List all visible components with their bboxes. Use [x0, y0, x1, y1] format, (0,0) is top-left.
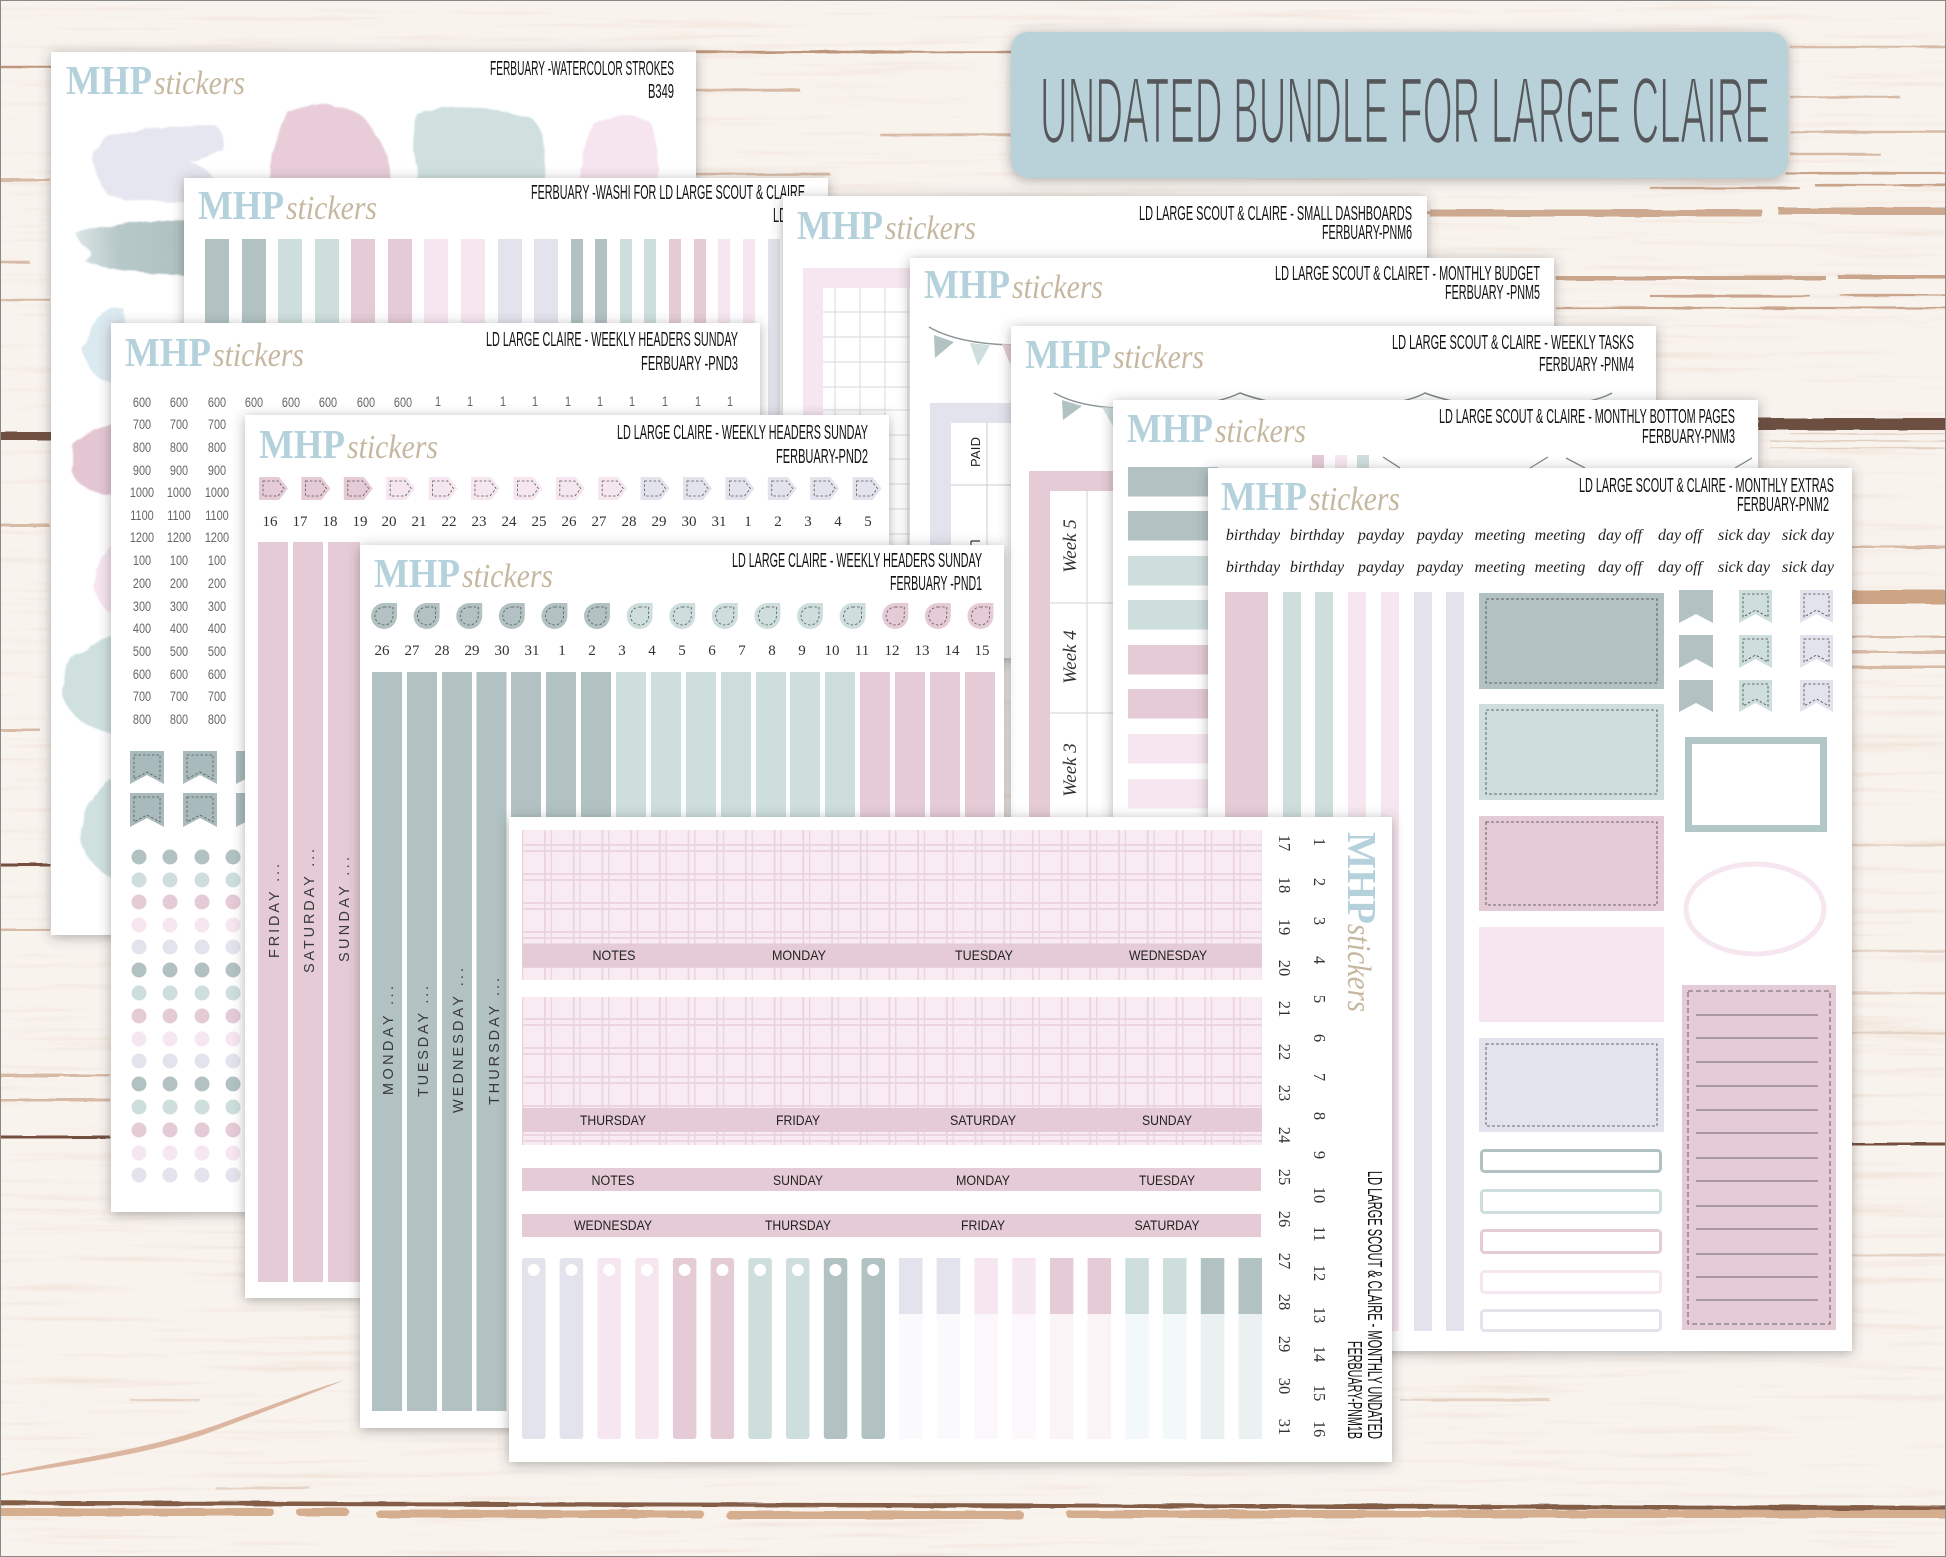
rotated date column 17-31: 17 — [1275, 835, 1294, 851]
plaid note block two: THURSDAY — [580, 1112, 647, 1128]
sheet title text: LD LARGE CLAIRE - WEEKLY HEADERS SUNDAY — [732, 550, 982, 572]
dashed label boxes — [1479, 593, 1664, 1132]
plaid note block two: SUNDAY — [1142, 1112, 1193, 1128]
sheet title text — [1579, 475, 1834, 516]
square frame — [1688, 740, 1824, 828]
time numbers grid: 800 — [170, 712, 188, 727]
time numbers grid: 100 — [208, 553, 226, 568]
time numbers grid: 900 — [170, 463, 188, 478]
sheet title text: LD — [773, 205, 787, 227]
sheet: small dashboards — [783, 196, 1427, 600]
date numbers: 15 — [974, 643, 990, 659]
sheet title text: FERBUARY-PNM3 — [1642, 426, 1735, 448]
time numbers grid: 600 — [133, 667, 151, 682]
sheet: monthly bottom pages — [1113, 400, 1758, 900]
sheet title text — [531, 182, 805, 227]
lined notes panel — [1682, 985, 1836, 1330]
sheet title text: FERBUARY-PND2 — [776, 446, 868, 468]
time numbers grid: 600 — [282, 395, 300, 410]
sheet title text — [490, 58, 674, 103]
date numbers: 26 — [562, 514, 577, 530]
oval frame — [1686, 864, 1824, 954]
logo: MHP stickers: stickers — [1215, 413, 1306, 450]
date numbers: 31 — [524, 643, 540, 659]
plaid note block one: MONDAY — [772, 947, 827, 963]
time numbers grid: 900 — [133, 463, 151, 478]
time numbers grid: 500 — [133, 644, 151, 659]
rotated date column 1-16: 14 — [1310, 1346, 1329, 1362]
date numbers: 12 — [884, 643, 900, 659]
time numbers grid: 1000 — [205, 485, 229, 500]
day band three — [522, 1168, 1261, 1191]
logo: MHP stickers: stickers — [154, 65, 245, 102]
date numbers: 10 — [824, 643, 840, 659]
time numbers grid: 1000 — [130, 485, 154, 500]
rotated date column 1-16: 13 — [1310, 1307, 1329, 1323]
vertical stripes — [1225, 592, 1464, 1331]
date numbers: 3 — [804, 514, 812, 530]
rotated date column 17-31: 21 — [1275, 1001, 1294, 1017]
time numbers grid: 800 — [133, 440, 151, 455]
logo: MHP stickers: MHP — [374, 550, 460, 596]
logo: MHP stickers: stickers — [885, 210, 976, 247]
sheet: weekly headers PND3 — [111, 323, 760, 1212]
sheet: monthly budget — [910, 258, 1554, 658]
small stripes and garland ends — [1312, 455, 1752, 475]
time numbers grid: 800 — [208, 440, 226, 455]
date numbers: 30 — [682, 514, 696, 530]
rounded outline bars — [1482, 1150, 1660, 1330]
time numbers grid: 600 — [208, 395, 226, 410]
script word labels: payday — [1416, 527, 1464, 544]
page-flag tabs with holes — [522, 1258, 885, 1439]
rotated date column 1-16: 9 — [1310, 1151, 1329, 1159]
logo: MHP stickers: MHP — [259, 421, 345, 467]
date numbers: 4 — [834, 514, 842, 530]
date numbers: 4 — [648, 643, 656, 659]
time numbers grid: 700 — [133, 689, 151, 704]
rotated date column 17-31: 23 — [1275, 1085, 1294, 1101]
bunting garland — [1054, 393, 1612, 426]
week labels: Week 3 — [1060, 743, 1081, 797]
sheet title text — [1139, 203, 1412, 244]
day band four — [522, 1214, 1261, 1237]
time numbers grid: 1 — [435, 394, 441, 409]
time numbers grid: 600 — [208, 667, 226, 682]
sheet title text: FERBUARY-PNM6 — [1322, 222, 1412, 244]
rotated date column 1-16 — [1310, 838, 1329, 1437]
sheet title text: FERBUARY -PND1 — [890, 573, 982, 595]
logo: MHP stickers: stickers — [347, 429, 438, 466]
logo: MHP stickers — [1221, 473, 1400, 519]
script word labels: birthday — [1290, 559, 1345, 576]
time numbers grid: 700 — [170, 689, 188, 704]
watercolor blobs — [62, 104, 658, 882]
rotated logo: MHP — [1339, 832, 1385, 924]
time numbers grid: 700 — [208, 689, 226, 704]
sheet: watercolor strokes — [51, 52, 696, 935]
time numbers grid: 1100 — [130, 508, 154, 523]
dot stickers — [139, 857, 233, 1175]
time numbers grid: 600 — [319, 395, 337, 410]
script word labels: sick day — [1782, 527, 1835, 544]
date numbers: 2 — [588, 643, 596, 659]
logo: MHP stickers: stickers — [462, 558, 553, 595]
logo: MHP stickers — [1127, 405, 1306, 451]
weekly table frame — [1029, 471, 1200, 830]
date numbers — [262, 514, 872, 530]
date numbers: 31 — [712, 514, 726, 530]
script word labels: day off — [1658, 527, 1705, 544]
plaid note block one: TUESDAY — [955, 947, 1014, 963]
vertical day strips: FRIDAY ... — [267, 864, 283, 958]
logo: MHP stickers: stickers — [1012, 269, 1103, 306]
time numbers grid: 200 — [170, 576, 188, 591]
rotated date column 1-16: 10 — [1310, 1187, 1329, 1203]
logo: MHP stickers: MHP — [66, 57, 152, 103]
vertical day strips: THURSDAY ... — [487, 978, 503, 1105]
time numbers grid: 1 — [727, 394, 733, 409]
time numbers grid: 700 — [208, 417, 226, 432]
script word labels: payday — [1416, 559, 1464, 576]
time numbers grid: 1 — [597, 394, 603, 409]
rotated date column 17-31: 29 — [1275, 1336, 1294, 1352]
date numbers — [374, 643, 990, 659]
logo: MHP stickers: MHP — [125, 329, 211, 375]
time numbers grid: 600 — [394, 395, 412, 410]
time numbers grid: 600 — [170, 667, 188, 682]
date numbers: 3 — [618, 643, 626, 659]
tab icons — [259, 477, 882, 500]
vertical day strips — [372, 672, 995, 1411]
date numbers: 24 — [502, 514, 517, 530]
day band three: SUNDAY — [773, 1172, 824, 1188]
script word labels: sick day — [1718, 527, 1771, 544]
sheet: washi strips — [184, 178, 828, 578]
time numbers grid: 500 — [208, 644, 226, 659]
script word labels: birthday — [1290, 527, 1345, 544]
horizontal stripes — [1128, 467, 1218, 808]
script word labels: payday — [1357, 527, 1405, 544]
sheet: monthly extras — [1208, 468, 1852, 1351]
logo: MHP stickers — [259, 421, 438, 467]
day band four: WEDNESDAY — [574, 1217, 653, 1233]
sheet: monthly undated PNM1B — [509, 817, 1392, 1462]
time numbers grid: 800 — [170, 440, 188, 455]
rotated date column 1-16: 11 — [1310, 1226, 1329, 1242]
rotated date column 1-16: 6 — [1310, 1034, 1329, 1042]
rotated date column 17-31: 24 — [1275, 1127, 1294, 1143]
rotated logo — [1339, 832, 1385, 1012]
day band three: MONDAY — [956, 1172, 1011, 1188]
script word labels: birthday — [1226, 527, 1281, 544]
script word labels: meeting — [1475, 527, 1525, 544]
rotated date column 1-16: 5 — [1310, 995, 1329, 1003]
plaid note block one — [522, 830, 1262, 980]
sheet title text — [617, 422, 868, 468]
rotated logo: stickers — [1340, 924, 1377, 1012]
script word labels: day off — [1658, 559, 1705, 576]
date numbers: 17 — [292, 514, 308, 530]
sheet title text: FERBUARY -PNM4 — [1539, 354, 1634, 376]
date numbers: 20 — [382, 514, 396, 530]
vertical day strips: TUESDAY ... — [416, 986, 432, 1097]
time numbers grid: 400 — [208, 621, 226, 636]
time numbers grid: 400 — [170, 621, 188, 636]
time numbers grid: 1 — [695, 394, 701, 409]
sheet title text: FERBUARY -PNM5 — [1445, 282, 1540, 304]
logo: MHP stickers: MHP — [1127, 405, 1213, 451]
logo: MHP stickers: MHP — [797, 202, 883, 248]
time numbers grid: 200 — [133, 576, 151, 591]
week labels: Week 4 — [1060, 630, 1081, 684]
time numbers grid — [130, 394, 733, 727]
time numbers grid: 300 — [208, 599, 226, 614]
sheet: weekly headers PND2 — [245, 415, 889, 1298]
date numbers: 5 — [864, 514, 872, 530]
rotated date column 17-31: 26 — [1275, 1211, 1294, 1227]
rotated date column 1-16: 1 — [1310, 838, 1329, 846]
date numbers: 8 — [768, 643, 776, 659]
logo: MHP stickers: MHP — [924, 261, 1010, 307]
vertical day strips: SATURDAY ... — [302, 849, 318, 973]
sheet title text — [1439, 406, 1735, 448]
date numbers: 23 — [472, 514, 486, 530]
rotated date column 17-31: 18 — [1275, 877, 1294, 893]
time numbers grid: 600 — [170, 395, 188, 410]
day band four: FRIDAY — [961, 1217, 1006, 1233]
sheet title text — [732, 550, 982, 595]
plaid note block two: FRIDAY — [776, 1112, 821, 1128]
time numbers grid: 1200 — [167, 530, 191, 545]
date numbers: 9 — [798, 643, 806, 659]
time numbers grid: 1 — [565, 394, 571, 409]
sheet title text: LD LARGE CLAIRE - WEEKLY HEADERS SUNDAY — [486, 329, 738, 351]
time numbers grid: 600 — [133, 395, 151, 410]
date numbers: 5 — [678, 643, 686, 659]
date numbers: 7 — [738, 643, 746, 659]
time numbers grid: 1200 — [130, 530, 154, 545]
script word labels: birthday — [1226, 559, 1281, 576]
script word labels: meeting — [1535, 559, 1585, 576]
time numbers grid: 1 — [532, 394, 538, 409]
time numbers grid: 100 — [133, 553, 151, 568]
logo: MHP stickers: MHP — [1025, 331, 1111, 377]
time numbers grid: 800 — [133, 712, 151, 727]
time numbers grid: 1100 — [205, 508, 229, 523]
time numbers grid: 500 — [170, 644, 188, 659]
date numbers: 16 — [262, 514, 278, 530]
rotated date column 1-16: 4 — [1310, 956, 1329, 964]
flag icons — [1679, 590, 1833, 712]
date numbers: 11 — [855, 643, 869, 659]
sheet: weekly tasks — [1011, 326, 1656, 830]
script word labels: sick day — [1718, 559, 1771, 576]
time numbers grid: 600 — [245, 395, 263, 410]
logo: MHP stickers: stickers — [1309, 481, 1400, 518]
logo: MHP stickers — [924, 261, 1103, 307]
logo: MHP stickers: stickers — [1113, 339, 1204, 376]
date numbers: 30 — [494, 643, 510, 659]
logo: MHP stickers — [374, 550, 553, 596]
two-tone page-flag tabs — [899, 1258, 1262, 1439]
time numbers grid: 300 — [170, 599, 188, 614]
script word labels: day off — [1598, 559, 1645, 576]
date numbers: 26 — [374, 643, 390, 659]
rotated date column 17-31: 22 — [1275, 1044, 1294, 1060]
rotated date column 1-16: 16 — [1310, 1421, 1329, 1437]
time numbers grid: 1000 — [167, 485, 191, 500]
date numbers: 19 — [352, 514, 368, 530]
sheet title text: LD LARGE CLAIRE - WEEKLY HEADERS SUNDAY — [617, 422, 868, 444]
logo: MHP stickers: MHP — [1221, 473, 1307, 519]
time numbers grid: 800 — [208, 712, 226, 727]
budget table frame — [930, 403, 1100, 600]
logo: MHP stickers — [66, 57, 245, 103]
time numbers grid: 400 — [133, 621, 151, 636]
day band three: NOTES — [592, 1172, 634, 1188]
rotated date column 1-16: 7 — [1310, 1073, 1329, 1081]
logo: MHP stickers — [198, 182, 377, 228]
sheet title text: FERBUARY -WASHI FOR LD LARGE SCOUT & CLAIRE — [531, 182, 805, 204]
date numbers: 29 — [464, 643, 480, 659]
script word labels: meeting — [1475, 559, 1525, 576]
vertical day strips: MONDAY ... — [381, 986, 397, 1095]
script word labels: meeting — [1535, 527, 1585, 544]
dashboard pink frame and grid — [803, 268, 1000, 600]
time numbers grid: 1 — [662, 394, 668, 409]
day band three: TUESDAY — [1139, 1172, 1196, 1188]
week labels — [1060, 519, 1081, 797]
rotated date column 1-16: 15 — [1310, 1385, 1329, 1401]
plaid note block one: NOTES — [592, 947, 636, 963]
budget table frame: PAID — [968, 437, 983, 467]
date numbers: 21 — [412, 514, 426, 530]
sheet title text: FERBUARY -PND3 — [641, 353, 738, 375]
logo: MHP stickers: MHP — [198, 182, 284, 228]
rotated date column 1-16: 3 — [1310, 917, 1329, 925]
sheet title text: FERBUARY -WATERCOLOR STROKES — [490, 58, 674, 80]
drop icons — [371, 603, 993, 629]
time numbers grid: 900 — [208, 463, 226, 478]
washi stripes — [205, 239, 780, 439]
date numbers: 13 — [914, 643, 930, 659]
bunting garland — [929, 327, 1020, 366]
rotated sheet title text: FERBUARY-PNM1B — [1343, 1341, 1365, 1439]
time numbers grid: 200 — [208, 576, 226, 591]
time numbers grid: 700 — [170, 417, 188, 432]
script word labels: sick day — [1782, 559, 1835, 576]
date numbers: 27 — [404, 643, 420, 659]
plaid note block two — [522, 997, 1262, 1145]
sheet title text — [1275, 263, 1540, 304]
date numbers: 2 — [774, 514, 782, 530]
date numbers: 28 — [622, 514, 636, 530]
date numbers: 25 — [532, 514, 546, 530]
date numbers: 22 — [442, 514, 456, 530]
logo: MHP stickers: stickers — [286, 190, 377, 227]
rotated date column 1-16: 8 — [1310, 1112, 1329, 1120]
time numbers grid: 1 — [629, 394, 635, 409]
vertical day strips: SUNDAY ... — [337, 857, 353, 962]
date numbers: 27 — [592, 514, 607, 530]
time numbers grid: 700 — [133, 417, 151, 432]
sheet title text — [1392, 332, 1634, 376]
date numbers: 29 — [652, 514, 666, 530]
rotated date column 17-31: 25 — [1275, 1169, 1294, 1185]
rotated date column 1-16: 2 — [1310, 878, 1329, 886]
logo: MHP stickers — [797, 202, 976, 248]
rotated date column 17-31: 30 — [1275, 1378, 1294, 1394]
date numbers: 1 — [558, 643, 566, 659]
date numbers: 1 — [744, 514, 752, 530]
date numbers: 18 — [322, 514, 338, 530]
script word labels — [1226, 527, 1835, 576]
day band four: THURSDAY — [765, 1217, 832, 1233]
rotated date column 17-31 — [1275, 835, 1294, 1435]
logo: MHP stickers — [1025, 331, 1204, 377]
day band four: SATURDAY — [1134, 1217, 1200, 1233]
time numbers grid: 600 — [357, 395, 375, 410]
vertical day strips: WEDNESDAY ... — [451, 968, 467, 1113]
rotated date column 17-31: 31 — [1275, 1419, 1294, 1435]
rotated sheet title text — [1343, 1171, 1385, 1439]
time numbers grid: 1200 — [205, 530, 229, 545]
script word labels: payday — [1357, 559, 1405, 576]
sheet title text — [486, 329, 738, 375]
rotated date column 1-16: 12 — [1310, 1265, 1329, 1281]
plaid note block one: WEDNESDAY — [1129, 947, 1208, 963]
sheet title text: FERBUARY-PNM2 — [1737, 494, 1829, 516]
sheet title text: LD LARGE SCOUT & CLAIRET - MONTHLY BUDGET — [1275, 263, 1540, 285]
time numbers grid: 1 — [467, 394, 473, 409]
vertical day strips — [258, 542, 360, 1282]
rotated date column 17-31: 20 — [1275, 960, 1294, 976]
rotated date column 17-31: 27 — [1275, 1253, 1294, 1269]
sheet title text: LD LARGE SCOUT & CLAIRE - WEEKLY TASKS — [1392, 332, 1634, 354]
time numbers grid: 1 — [500, 394, 506, 409]
rotated date column 17-31: 28 — [1275, 1294, 1294, 1310]
logo: MHP stickers — [125, 329, 304, 375]
time numbers grid: 300 — [133, 599, 151, 614]
script word labels: day off — [1598, 527, 1645, 544]
rotated date column 17-31: 19 — [1275, 919, 1294, 935]
time numbers grid: 1100 — [167, 508, 191, 523]
plaid note block two: SATURDAY — [950, 1112, 1017, 1128]
sheet title text: B349 — [648, 81, 674, 103]
date numbers: 6 — [708, 643, 716, 659]
logo: MHP stickers: stickers — [213, 337, 304, 374]
title banner — [1011, 32, 1788, 178]
week labels: Week 5 — [1060, 519, 1081, 573]
date numbers: 14 — [944, 643, 960, 659]
sheet: weekly headers PND1 — [360, 545, 1004, 1428]
date numbers: 28 — [434, 643, 450, 659]
flag icons — [130, 751, 270, 827]
time numbers grid: 100 — [170, 553, 188, 568]
sheet title text: LD LARGE SCOUT & CLAIRE - SMALL DASHBOARDS — [1139, 203, 1412, 225]
